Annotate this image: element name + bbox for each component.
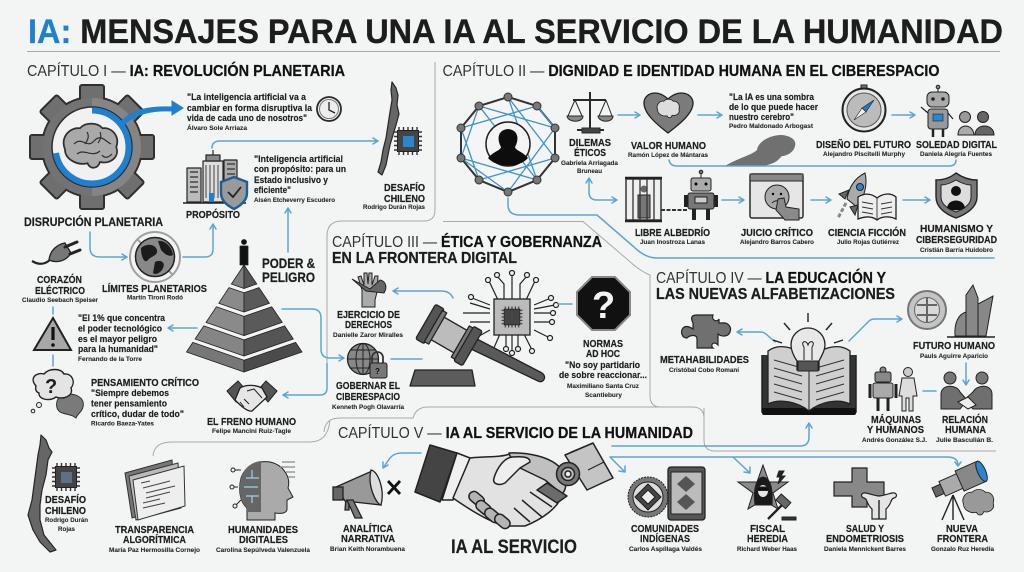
label: salud y endometriosis: SALUD Y (846, 523, 884, 535)
label: nueva frontera: FRONTERA (937, 533, 988, 545)
label: ejercicio de derechos: EJERCICIO DE (337, 309, 400, 321)
panel: chapter III (332, 232, 647, 411)
label: metahabilidades (660, 354, 749, 374)
label: humanidades digitales (216, 524, 310, 554)
label: metahabilidades: METAHABILIDADES (660, 354, 749, 366)
quote: Aisén (254, 154, 346, 204)
text: pensamiento crítico (91, 376, 199, 428)
icon: telescope and brain (930, 460, 994, 520)
icon: megaphone with X (333, 470, 400, 518)
text: pensamiento crítico: "Siempre debemos (91, 388, 169, 398)
icon: star fiscal with gavel (738, 465, 796, 520)
icon: network with person (457, 93, 559, 196)
heading: chapter IV: CAPÍTULO IV — LA EDUCACIÓN Y (656, 268, 886, 287)
arrow: book to futuro (849, 316, 902, 341)
label: nueva frontera (931, 523, 994, 553)
quote: Fernando: para la humanidad" (78, 344, 158, 354)
label: poder y peligro (262, 255, 315, 285)
label: humanidades digitales: Carolina Sepúlveda Valenzuela (216, 547, 310, 554)
label: comunidades indígenas: COMUNIDADES (631, 523, 699, 535)
label: nueva frontera: Gonzalo Ruz Heredia (931, 546, 994, 553)
icon: medical cross and uterus (834, 468, 896, 519)
icon: pyramid with figure (186, 240, 302, 372)
label: diseño del futuro (816, 138, 911, 158)
label: el freno humano (207, 416, 296, 435)
label: relación humana (936, 413, 993, 444)
heading: chapter III (332, 232, 602, 267)
text: normas ad hoc: NORMAS (583, 338, 623, 350)
connector: row link (669, 160, 956, 166)
label: límites planetarios: Martín Tironi Rodó (127, 294, 183, 302)
label: dilemas éticos: Gabriela Arriagada (561, 160, 618, 167)
label: ciencia ficción (828, 226, 906, 246)
quote: Pedro (729, 92, 819, 130)
label: máquinas y humanos (862, 413, 927, 444)
label: límites planetarios: LÍMITES PLANETARIOS (102, 282, 207, 295)
heading: chapter II: CAPÍTULO II — DIGNIDAD E IDENTIDAD HUMANA EN EL CIBERESPACIO (442, 61, 940, 80)
label: analítica narrativa: ANALÍTICA (343, 522, 393, 535)
icon: warning triangle (34, 318, 71, 350)
label: humanidades digitales: HUMANIDADES (228, 524, 298, 536)
quote: Aisén: con propósito: para un (254, 164, 346, 174)
quote: Fernando: "El 1% que concentra (78, 313, 165, 323)
quote: Fernando: es el mayor peligro (78, 334, 158, 344)
text: pensamiento crítico: PENSAMIENTO CRÍTICO (91, 376, 199, 389)
label: propósito: PROPÓSITO (186, 208, 240, 221)
label: corazón eléctrico: ELÉCTRICO (35, 284, 85, 297)
arrow: network to panels (508, 198, 994, 258)
heading: chapter III: CAPÍTULO III — ÉTICA Y GOBERNANZA (332, 232, 602, 251)
label: diseño del futuro: DISEÑO DEL FUTURO (816, 138, 911, 151)
icon: heart with brain (644, 93, 693, 133)
label: comunidades indígenas (629, 523, 702, 553)
label: dilemas éticos: ÉTICOS (574, 146, 606, 159)
icon: globe and lock (348, 344, 387, 378)
label: analítica narrativa: NARRATIVA (341, 533, 395, 545)
label: corazón eléctrico: Claudio Seebach Speiser (22, 297, 98, 304)
label: corazón eléctrico: CORAZÓN (37, 273, 82, 286)
label: desafío chileno: CHILENO (384, 193, 425, 205)
label: el freno humano: EL FRENO HUMANO (207, 416, 296, 428)
text: pensamiento crítico: crítico, dudar de todo" (91, 409, 184, 419)
icon: chip with traces (463, 270, 558, 356)
connector: máquinas to relación (923, 390, 936, 392)
icon: clock (317, 97, 341, 121)
arrow: handshake to megaphone (383, 453, 421, 468)
icon: rocket and book (838, 173, 896, 220)
label: libre albedrío: Juan Inostroza Lanas (640, 239, 705, 246)
arrow: disrupción to límites (90, 232, 127, 260)
arrow: juicio to ciencia (811, 197, 831, 203)
label: desafío chileno: Rodrigo Durán (45, 517, 88, 524)
panel: chapter IV (656, 268, 995, 444)
label: juicio crítico (740, 226, 814, 246)
label: gobernar el ciberespacio (332, 380, 404, 411)
arrow: gear to quote (120, 101, 183, 125)
label: desafío chileno: Rojas (58, 526, 75, 533)
icon: octagon question: ? (592, 285, 615, 327)
label: dilemas éticos (561, 137, 618, 175)
heading: chapter V: CAPÍTULO V — IA AL SERVICIO DE LA HUMANIDAD (338, 423, 693, 442)
label: libre albedrío (635, 226, 710, 246)
panel: chapter V (28, 423, 994, 558)
arrow: diseño to soledad (892, 112, 915, 118)
label: corazón eléctrico (22, 273, 98, 304)
connector: gobernar to gavel (391, 358, 422, 360)
arrow: pyramid to gobernar (282, 309, 344, 361)
arrow: book to puzzle (737, 329, 775, 342)
arrow: dilemas to valor (618, 112, 640, 118)
arrow: libre to juicio (722, 197, 744, 203)
icon: Chile map with chip (378, 82, 422, 175)
label: dilemas éticos: DILEMAS (569, 137, 611, 149)
quote: Fernando: Fernando de la Torre (78, 356, 142, 363)
label: valor humano (628, 140, 708, 159)
label: disrupción planetaria: DISRUPCIÓN PLANETARIA (24, 214, 163, 229)
quote: Aisén: Estado inclusivo y (254, 175, 328, 185)
label: ia al servicio: IA AL SERVICIO (451, 537, 577, 558)
label: salud y endometriosis: Daniela Mennickent Barres (824, 546, 906, 553)
arrow: valor to quote (698, 112, 722, 118)
icon: gear with brain (30, 85, 154, 209)
panel: chapter II (442, 61, 997, 258)
arrow: handshake to book (612, 423, 812, 446)
icon: raised hand (352, 273, 386, 307)
arrow: poder to quote (285, 208, 291, 252)
label: futuro humano: FUTURO HUMANO (913, 340, 995, 352)
heading: chapter I: CAPÍTULO I — IA: REVOLUCIÓN PLANETARIA (27, 61, 345, 80)
text: normas ad hoc: Scantlebury (585, 392, 622, 399)
icon: buildings and shield (183, 150, 247, 209)
icon: people handshake (941, 372, 992, 409)
quote: Álvaro: "La inteligencia artificial va a (187, 92, 306, 102)
arrow: pyramid to quote (168, 325, 197, 331)
label: comunidades indígenas: Carlos Aspíllaga Valdés (629, 546, 702, 553)
text: normas ad hoc: de sobre reaccionar... (559, 370, 647, 380)
label: gobernar el ciberespacio: CIBERESPACIO (336, 391, 400, 403)
quote: Álvaro: vida de cada uno de nosotros" (187, 113, 307, 123)
label: fiscal heredia: Richard Weber Haas (737, 546, 797, 553)
text: pensamiento crítico: Ricardo Baeza-Yates (91, 420, 154, 428)
label: gobernar el ciberespacio: GOBERNAR EL (336, 380, 400, 392)
label: el freno humano: Felipe Mancini Ruiz-Tagle (212, 428, 291, 435)
icon: robot and human (870, 367, 917, 411)
heading: chapter IV: LAS NUEVAS ALFABETIZACIONES (656, 286, 895, 303)
label: desafío chileno: DESAFÍO (384, 181, 425, 194)
label: transparencia algorítmica: María Paz Hermosilla Cornejo (109, 547, 200, 554)
connector: corazón to warning (52, 307, 54, 366)
label: poder y peligro: PODER & (262, 255, 315, 271)
label: humanismo y ciberseguridad: CIBERSEGURIDAD (916, 234, 997, 246)
icon: globe and lock: ? (375, 367, 380, 376)
quote: Fernando: el poder tecnológico (78, 324, 163, 334)
label: nueva frontera: NUEVA (946, 523, 978, 535)
arrow: límites to propósito (183, 224, 216, 257)
label: máquinas y humanos: MÁQUINAS (871, 413, 921, 426)
quote: Aisén: Aisén Etcheverry Escudero (254, 197, 335, 204)
shadow silhouette (725, 135, 795, 166)
label: transparencia algorítmica: ALGORÍTMICA (123, 533, 186, 546)
icon: small handshake (227, 381, 277, 411)
label: máquinas y humanos: Y HUMANOS (867, 424, 924, 436)
icon: robot and people (921, 85, 994, 137)
label: desafío chileno: Rodrigo Durán Rojas (363, 204, 425, 211)
heading: chapter III: EN LA FRONTERA DIGITAL (332, 250, 517, 267)
label: poder y peligro: PELIGRO (262, 269, 315, 285)
arrow: ciencia to humanismo (903, 197, 930, 203)
text: normas ad hoc (559, 338, 647, 399)
label: ejercicio de derechos: Danielle Zaror Miralles (333, 332, 403, 339)
label: humanismo y ciberseguridad: Cristián Barría Huidobro (920, 247, 993, 254)
label: salud y endometriosis: ENDOMETRIOSIS (826, 533, 904, 545)
quote: Aisén: eficiente" (254, 185, 291, 195)
text: pensamiento crítico: tener pensamiento (91, 398, 168, 408)
icon: gavel (410, 304, 545, 386)
label: relación humana: HUMANA (945, 424, 986, 436)
quote: Álvaro: Álvaro Sole Arriaza (187, 123, 247, 132)
label: desafío chileno (363, 181, 425, 211)
label: transparencia algorítmica: TRANSPARENCIA (115, 524, 194, 536)
label: ejercicio de derechos: DERECHOS (345, 319, 392, 331)
quote: Pedro: de lo que puede hacer (729, 102, 819, 112)
quote: Aisén: "Inteligencia artificial (254, 154, 343, 164)
label: ejercicio de derechos (333, 309, 403, 339)
label: desafío chileno: DESAFÍO (45, 493, 86, 506)
heading: chapter IV (656, 268, 895, 303)
text: normas ad hoc: "No soy partidario (565, 360, 641, 370)
label: ciencia ficción: Julio Rojas Gutiérrez (837, 239, 900, 246)
label: metahabilidades: Cristóbal Cobo Romaní (669, 367, 739, 374)
arrow: futuro to relación (963, 363, 969, 385)
label: comunidades indígenas: INDÍGENAS (640, 532, 690, 545)
arrow: dilemas to libre albedrío (586, 178, 617, 203)
label: valor humano: VALOR HUMANO (631, 140, 706, 152)
icon: thought bubble (31, 370, 83, 418)
text: normas ad hoc: AD HOC (586, 348, 620, 360)
label: humanismo y ciberseguridad: HUMANISMO Y (920, 223, 993, 235)
label: valor humano: Ramón López de Mántaras (628, 152, 708, 159)
panel: chapter I (22, 61, 425, 435)
label: diseño del futuro: Alejandro Piscitelli Murphy (823, 151, 905, 158)
icon: shield person (936, 173, 977, 218)
quote: Pedro: "La IA es una sombra (729, 92, 814, 102)
icon: globe (130, 232, 180, 282)
label: soledad digital: SOLEDAD DIGITAL (916, 139, 997, 151)
icon: browser face and hand (750, 174, 803, 220)
label: dilemas éticos: Bruneau (577, 168, 602, 175)
label: soledad digital (916, 139, 997, 158)
label: gobernar el ciberespacio: Kenneth Pogh Olavarría (332, 404, 404, 411)
icon: human and robot handshake (415, 443, 613, 531)
label: máquinas y humanos: Andrés González S.J. (862, 437, 927, 444)
label: relación humana: RELACIÓN (942, 413, 988, 426)
icon: seal and buildings (908, 285, 995, 337)
quote: Pedro: Pedro Maldonado Arbogast (729, 123, 814, 130)
icon: Chile map with chip (28, 435, 80, 552)
label: analítica narrativa: Brian Keith Norambuena (330, 546, 405, 553)
icon: code screens (125, 460, 185, 520)
quote: Pedro: nuestro cerebro" (729, 112, 794, 122)
icon: book with lightbulb (762, 313, 856, 415)
label: salud y endometriosis (824, 523, 906, 553)
icon: cage with robot (625, 170, 716, 221)
quote: Álvaro: cambiar en forma disruptiva la (187, 103, 312, 113)
label: fiscal heredia: HEREDIA (747, 533, 788, 545)
arrow: handshake to right row (610, 457, 961, 473)
icon: octagon question (577, 277, 630, 330)
text: normas ad hoc: Maximiliano Santa Cruz (567, 383, 640, 390)
label: fiscal heredia: FISCAL (750, 523, 786, 535)
label: relación humana: Julie Basculián B. (936, 437, 993, 444)
label: humanismo y ciberseguridad (916, 223, 997, 254)
icon: scales (567, 92, 613, 133)
label: futuro humano: Pauls Aguirre Aparicio (920, 353, 988, 360)
label: libre albedrío: LIBRE ALBEDRÍO (635, 226, 710, 239)
label: juicio crítico: Alejandro Barros Cabero (740, 239, 814, 246)
quote: Álvaro (187, 92, 312, 132)
connector: chip to octagon (558, 303, 572, 305)
arrow: panel to el freno humano (283, 363, 327, 398)
arrow: gavel to ejercicio (393, 288, 453, 298)
label: soledad digital: Daniela Alegría Fuentes (920, 151, 992, 158)
label: desafío chileno (45, 493, 88, 533)
icon: digital head (230, 461, 295, 520)
arrow: propósito to desafío (212, 138, 378, 148)
label: desafío chileno: CHILENO (45, 505, 86, 517)
label: analítica narrativa (330, 522, 405, 553)
icon: puzzle (682, 315, 731, 348)
label: límites planetarios (102, 282, 207, 302)
icon: mandala and tablet (628, 467, 705, 520)
label: juicio crítico: JUICIO CRÍTICO (741, 226, 813, 239)
label: humanidades digitales: DIGITALES (239, 534, 288, 546)
label: fiscal heredia (737, 523, 797, 553)
icon: plug (32, 242, 80, 264)
label: futuro humano (913, 340, 995, 360)
quote: Fernando (78, 313, 165, 363)
icon: compass (842, 85, 886, 132)
label: ciencia ficción: CIENCIA FICCIÓN (828, 226, 906, 239)
icon: thought bubble: ? (45, 376, 57, 398)
label: transparencia algorítmica (109, 524, 200, 554)
